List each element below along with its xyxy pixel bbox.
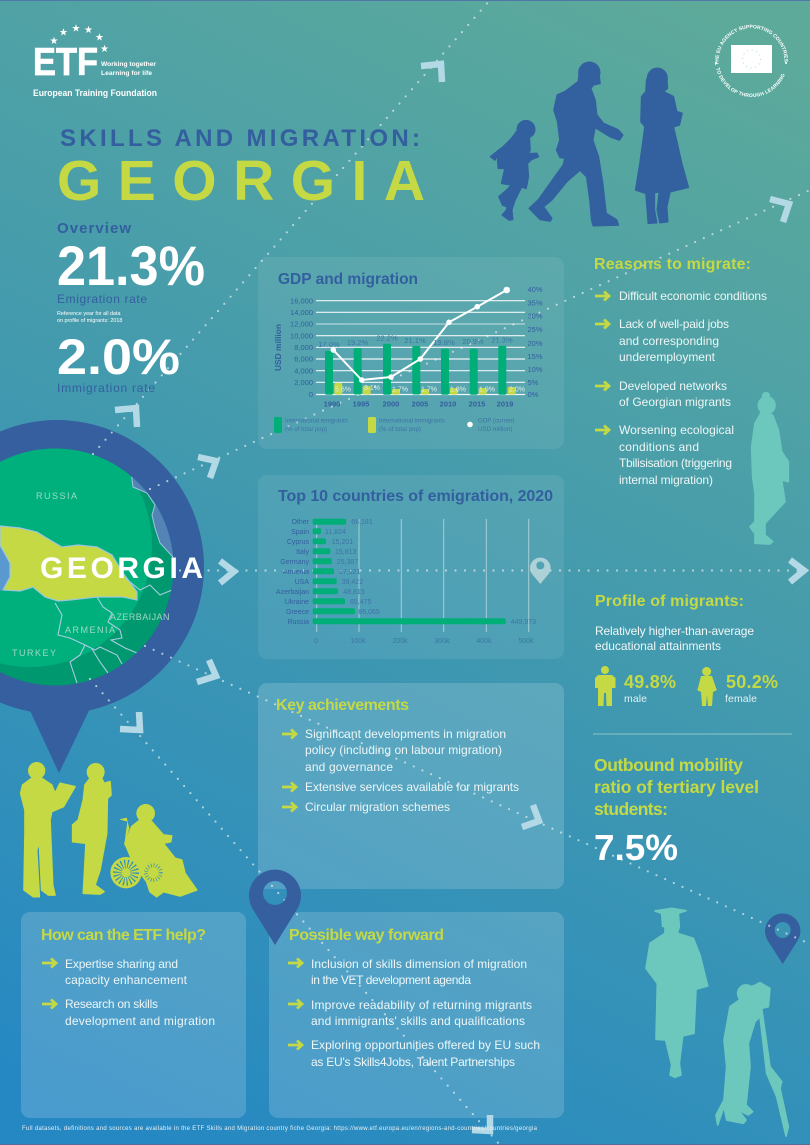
- bar values: 15,813: [335, 549, 357, 556]
- right axis: 10%: [528, 365, 543, 374]
- value axis: 300k: [434, 638, 450, 645]
- country names: Russia: [288, 619, 309, 626]
- left axis: 12,000: [290, 320, 313, 328]
- list: Extensive services available for migrants: [305, 780, 519, 794]
- list: Improve readability of returning migrants: [311, 998, 532, 1012]
- immigrant value labels: 2.0%: [509, 386, 525, 394]
- year labels: 2019: [497, 400, 513, 408]
- emigrant value labels: 19.2%: [347, 338, 368, 347]
- left axis: 14,000: [290, 308, 313, 317]
- list: development and migration: [65, 1014, 215, 1028]
- bars: international immigrants: [334, 383, 516, 394]
- left axis: 4,000: [294, 366, 313, 376]
- ETF logo: [33, 24, 157, 98]
- year labels: [324, 400, 513, 408]
- right axis: 25%: [528, 325, 543, 334]
- reasons to migrate: and corresponding: [619, 334, 719, 348]
- value axis: 200k: [392, 638, 408, 645]
- list: and immigrants' skills and qualifications: [311, 1014, 525, 1028]
- panel: GDP and migration: [258, 257, 564, 449]
- list: Research on skills: [65, 997, 158, 1011]
- tagline: Working together: [101, 61, 156, 68]
- value axis: 400k: [476, 638, 492, 645]
- left axis: 10,000: [290, 332, 313, 340]
- reasons to migrate: underemployment: [619, 350, 716, 364]
- pin: centre column: [249, 870, 301, 945]
- reasons to migrate: Tbilisisation (triggering: [619, 456, 732, 470]
- silhouettes: family: [491, 62, 688, 226]
- list: in the VET development agenda: [311, 973, 471, 987]
- left axis title: USD million: [273, 324, 283, 371]
- title: SKILLS AND MIGRATION:: [60, 125, 420, 152]
- legend: USD million): [478, 426, 512, 433]
- immigrant value labels: 1.9%: [479, 386, 495, 394]
- left axis: 6,000: [294, 354, 313, 364]
- right axis: 20%: [528, 339, 543, 348]
- overview: Reference year for all data: [57, 311, 121, 317]
- year labels: 1990: [324, 400, 340, 408]
- icon: female: [697, 667, 717, 706]
- panel: top 10 countries of emigration: [258, 475, 564, 659]
- left axis: [290, 296, 313, 399]
- left axis: 16,000: [290, 296, 313, 306]
- EU agency badge: TO DEVELOP THROUGH LEARNING: [716, 67, 784, 98]
- left axis: 2,000: [294, 378, 313, 387]
- outbound mobility: ratio of tertiary level: [594, 777, 759, 797]
- list: Expertise sharing and: [65, 957, 178, 971]
- bar values: [325, 519, 536, 626]
- EU agency badge: THE EU AGENCY SUPPORTING COUNTRIES: [715, 24, 788, 66]
- heading: Key achievements: [276, 697, 409, 714]
- profile of migrants: educational attainments: [595, 639, 721, 653]
- map pin with Georgia map: [0, 420, 204, 773]
- overview: 2.0%: [57, 329, 180, 385]
- silhouette: woman with bag: [750, 393, 788, 544]
- heading: Possible way forward: [289, 927, 444, 944]
- country names: Spain: [291, 529, 309, 536]
- reasons to migrate: Worsening ecological: [619, 423, 734, 437]
- legend: International immigrants: [379, 418, 445, 424]
- list: capacity enhancement: [65, 973, 188, 987]
- emigrant value labels: 22.2%: [376, 334, 398, 342]
- overview: Emigration rate: [57, 292, 147, 306]
- emigrant value labels: 20.9%: [462, 337, 484, 346]
- country names: USA: [295, 579, 309, 586]
- wordmark: ETF: [33, 41, 98, 84]
- stars: ★: [100, 44, 109, 55]
- right axis: 0%: [528, 390, 539, 399]
- legend: (% of total pop): [285, 426, 327, 433]
- bar values: 37,921: [339, 569, 361, 576]
- line: GDP: [330, 287, 510, 383]
- outbound mobility: Outbound mobility: [594, 755, 743, 775]
- right axis: 35%: [528, 298, 543, 308]
- stars: ★: [72, 24, 81, 34]
- list: [282, 727, 519, 814]
- emigrant value labels: 21.3%: [491, 336, 513, 344]
- overview: Overview: [57, 220, 131, 237]
- legend: (% of total pop): [379, 426, 421, 433]
- bar values: 25,387: [337, 559, 358, 566]
- right axis: 40%: [528, 285, 543, 294]
- list: [42, 957, 215, 1028]
- legend: [274, 417, 515, 433]
- reasons to migrate: [594, 256, 767, 487]
- list: Inclusion of skills dimension of migration: [311, 957, 527, 971]
- vertical gridlines: [317, 519, 529, 632]
- profile of migrants: [595, 593, 778, 706]
- overview: Immigration rate: [57, 381, 155, 395]
- bar values: 449,973: [511, 619, 536, 626]
- organisation name: European Training Foundation: [33, 88, 157, 98]
- chart heading: Top 10 countries of emigration, 2020: [278, 488, 553, 505]
- right axis: 15%: [528, 352, 543, 361]
- bar values: 11,824: [325, 529, 346, 536]
- value axis: 100k: [350, 638, 366, 645]
- profile of migrants: Relatively higher-than-average: [595, 624, 754, 638]
- country names: Other: [291, 519, 310, 526]
- reasons to migrate: Difficult economic conditions: [619, 289, 767, 303]
- country names: Germany: [280, 559, 309, 566]
- panel: possible way forward: [269, 912, 564, 1118]
- list: as EU's Skills4Jobs, Talent Partnerships: [311, 1055, 515, 1069]
- right axis: 30%: [528, 312, 543, 320]
- value axis: 500k: [518, 638, 534, 645]
- pin: bottom right: [765, 913, 800, 964]
- profile of migrants: 50.2%: [726, 672, 778, 692]
- map labels: ARMENIA: [65, 625, 117, 635]
- title: GEORGIA: [57, 149, 425, 213]
- emigrant value labels: 17.0%: [318, 340, 340, 349]
- immigrant value labels: 1.7%: [392, 386, 408, 394]
- reasons to migrate: Reasons to migrate:: [594, 256, 751, 273]
- outbound mobility: students:: [594, 799, 668, 819]
- horizontal bars: [313, 519, 506, 624]
- list: Exploring opportunities offered by EU such: [311, 1038, 540, 1052]
- map labels: AZERBAIJAN: [110, 612, 171, 622]
- country names: Ukraine: [285, 599, 309, 606]
- value axis: [314, 638, 534, 645]
- country names: Armenia: [283, 569, 309, 576]
- bars: international emigrants: [325, 344, 506, 395]
- map labels: TURKEY: [12, 648, 58, 658]
- reasons to migrate: internal migration): [619, 473, 713, 487]
- list: and governance: [305, 760, 393, 774]
- chevrons on routes: [115, 64, 804, 1131]
- profile of migrants: Profile of migrants:: [595, 593, 744, 610]
- immigrant value labels: 3.1%: [364, 385, 380, 392]
- profile of migrants: 49.8%: [624, 672, 676, 692]
- year labels: 2005: [412, 400, 428, 408]
- map labels: RUSSIA: [36, 491, 79, 501]
- reasons to migrate: Developed networks: [619, 379, 727, 393]
- ETF logo: Learning for life: [101, 70, 152, 77]
- list: Circular migration schemes: [305, 800, 450, 814]
- EU agency badge: [715, 24, 788, 98]
- bar values: 15,201: [332, 539, 353, 546]
- reasons to migrate: conditions and: [619, 440, 699, 454]
- list: [288, 957, 540, 1069]
- reasons to migrate: of Georgian migrants: [619, 395, 731, 409]
- bar values: 66,181: [351, 519, 373, 526]
- reasons to migrate: Lack of well-paid jobs: [619, 317, 729, 331]
- bar values: 65,475: [350, 599, 372, 606]
- legend: International emigrants: [285, 418, 348, 424]
- emigrant value labels: 21.1%: [404, 336, 426, 345]
- stars: ★: [59, 28, 68, 38]
- country names: Azerbaijan: [276, 589, 309, 596]
- panel: key achievements: [258, 683, 564, 889]
- country names: [276, 519, 310, 626]
- country names: Cyprus: [287, 539, 309, 546]
- right axis: 5%: [528, 378, 539, 387]
- map labels: GEORGIA: [40, 552, 203, 585]
- heading: How can the ETF help?: [41, 927, 206, 944]
- left axis: 8,000: [294, 343, 313, 352]
- pin: chart panel: [530, 558, 551, 584]
- bar values: 85,065: [358, 609, 380, 616]
- overview: on profile of migrants: 2018: [57, 318, 122, 324]
- stars: ★: [50, 36, 59, 47]
- stars: [50, 24, 109, 55]
- bar values: 39,422: [342, 579, 363, 586]
- value axis: 0: [314, 638, 318, 645]
- emigrant value labels: [318, 334, 513, 349]
- immigrant value labels: 1.8%: [450, 386, 466, 394]
- immigrant value labels: 1.7%: [421, 386, 437, 394]
- year labels: 1995: [353, 400, 369, 408]
- emigrant value labels: 19.8%: [433, 338, 455, 347]
- icon: male: [595, 666, 616, 706]
- legend: GDP (current: [478, 418, 515, 424]
- immigrant value labels: [335, 385, 525, 394]
- right axis: [528, 285, 543, 399]
- overview: [57, 220, 205, 395]
- left axis: 0: [309, 390, 313, 399]
- panel: how can the ETF help: [21, 912, 246, 1118]
- combo chart: gridlines: [316, 301, 525, 394]
- silhouettes: speakers and wheelchair user: [21, 762, 197, 897]
- outbound mobility: [594, 755, 759, 868]
- list: policy (including on labour migration): [305, 743, 502, 757]
- list: Significant developments in migration: [305, 727, 506, 741]
- year labels: 2015: [469, 400, 485, 408]
- stars: ★: [95, 32, 104, 44]
- profile of migrants: female: [725, 693, 757, 705]
- map labels: [12, 491, 203, 658]
- country names: Greece: [286, 609, 309, 616]
- overview: 21.3%: [57, 234, 205, 297]
- year labels: 2010: [440, 400, 456, 408]
- silhouettes: graduate and surveyor: [646, 908, 788, 1136]
- outbound mobility: 7.5%: [594, 827, 678, 868]
- profile of migrants: male: [624, 693, 647, 705]
- chart heading: GDP and migration: [278, 271, 418, 288]
- stars: ★: [84, 25, 93, 36]
- immigrant value labels: 5.6%: [335, 386, 351, 394]
- country names: Italy: [296, 549, 309, 556]
- bar values: 48,815: [343, 589, 365, 596]
- year labels: 2000: [383, 400, 399, 408]
- footer sources: Full datasets, definitions and sources are available in the ETF Skills and Migration country fiche Georgia: https://www.etf.europa.eu/en/regions-and-countries/countries/georgia: [22, 1126, 538, 1132]
